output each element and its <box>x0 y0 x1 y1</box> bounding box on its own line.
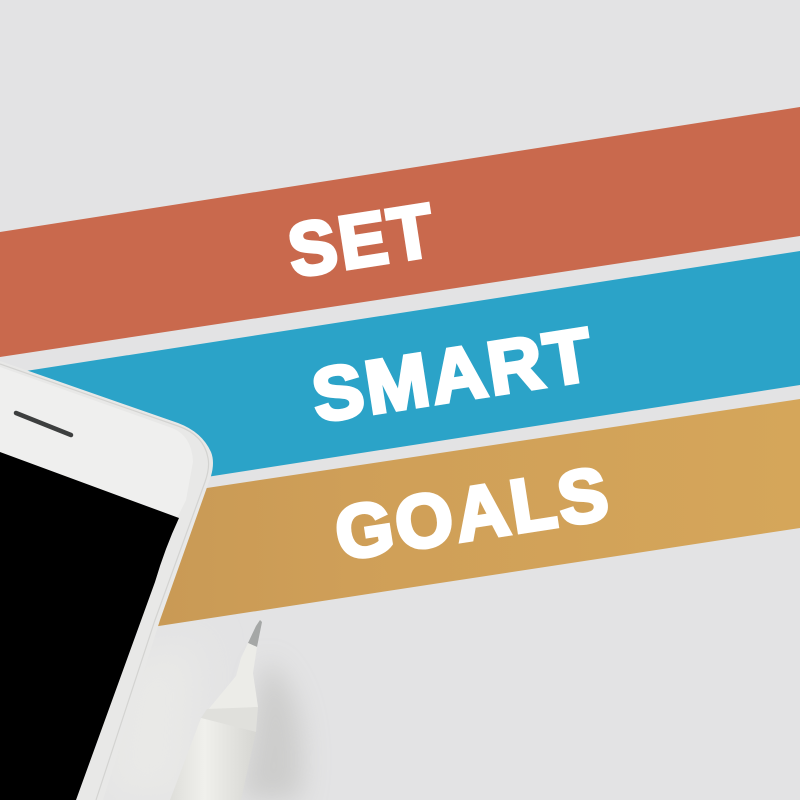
banner: gold stripe <box>100 399 800 635</box>
heading word: SET: SET <box>283 187 442 293</box>
pen tip <box>248 620 262 647</box>
icon: smartphone <box>0 361 213 800</box>
phone glass highlight <box>0 367 193 520</box>
pen neck <box>207 643 258 711</box>
heading word: GOALS: GOALS <box>330 450 616 576</box>
banner: blue stripe <box>0 251 800 509</box>
phone rim line <box>0 364 209 800</box>
phone body <box>0 361 213 800</box>
heading word: SMART: SMART <box>307 311 600 438</box>
pen collar <box>201 707 258 732</box>
speaker slot <box>16 413 71 435</box>
banner: red stripe <box>0 107 800 357</box>
icon: pen <box>170 620 262 800</box>
pen shadow <box>240 660 303 800</box>
phone screen <box>0 452 179 800</box>
pen body <box>170 718 256 800</box>
paper highlight near phone <box>100 640 200 800</box>
